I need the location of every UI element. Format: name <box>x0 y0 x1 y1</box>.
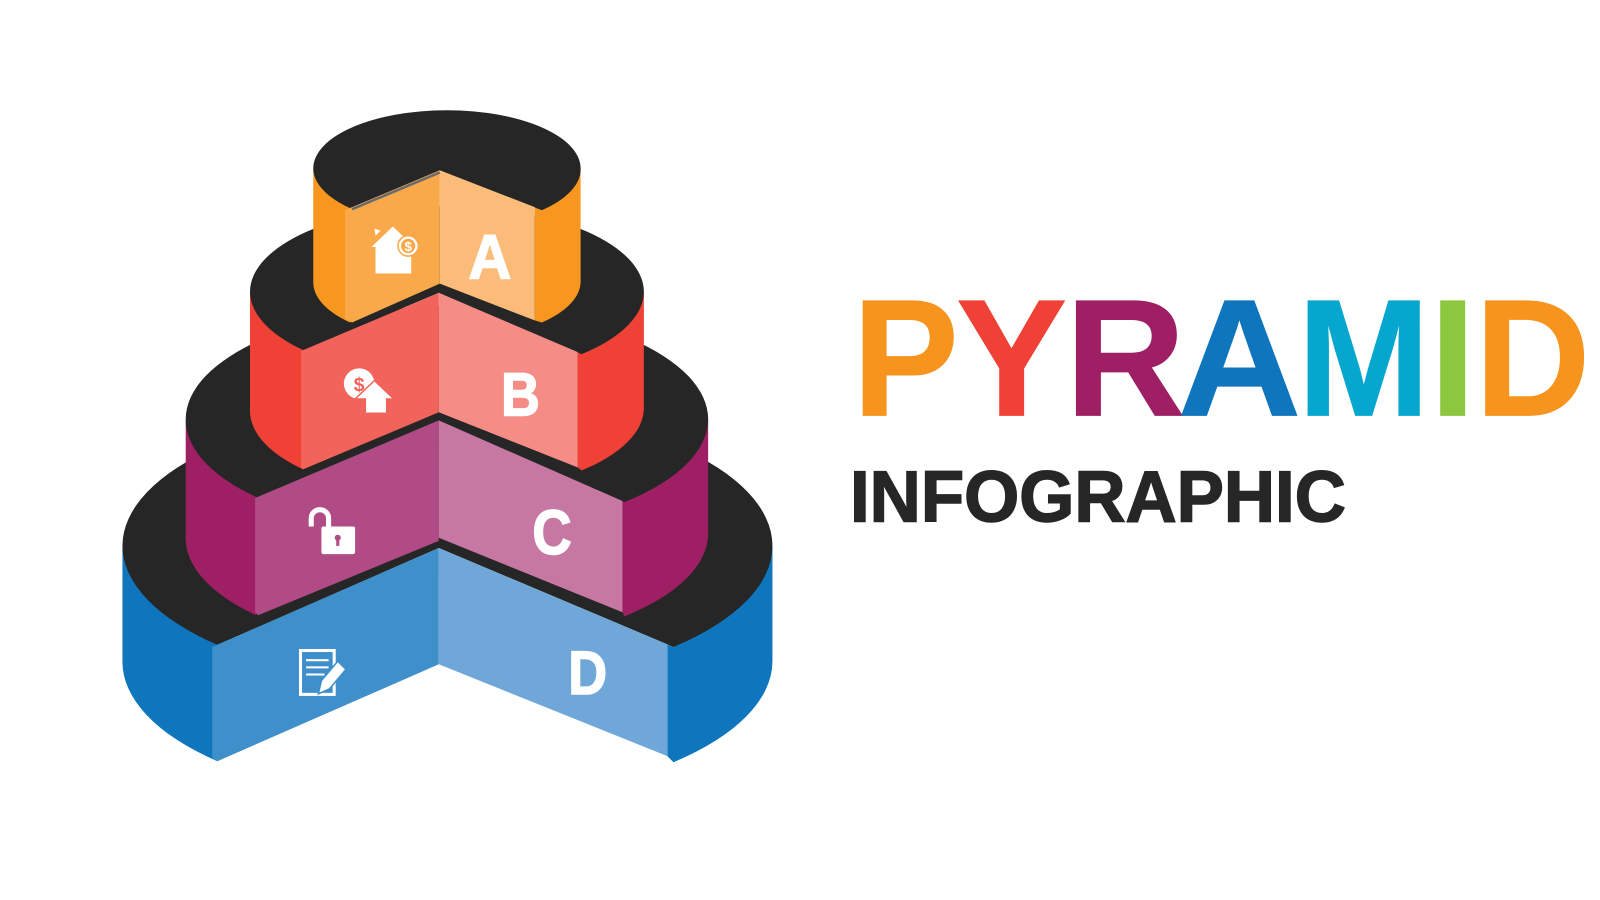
letter B: B <box>501 361 540 429</box>
icon: document with pencil <box>301 651 346 694</box>
tier A <box>313 110 581 322</box>
icon: open padlock <box>311 510 355 554</box>
pyramid <box>122 110 772 762</box>
letter D: D <box>568 640 607 708</box>
title: PYRAMID: M <box>1297 266 1430 451</box>
icon: dollar coin and house arrow: $ <box>354 374 365 396</box>
title: PYRAMID: D <box>1475 264 1590 451</box>
letter A: A <box>468 222 511 293</box>
title: PYRAMID: I <box>1430 265 1476 451</box>
tier C <box>186 306 708 616</box>
icon: dollar coin and house arrow <box>344 368 394 413</box>
title: PYRAMID: A <box>1178 265 1301 451</box>
tier B <box>250 206 644 470</box>
icon: house with coin <box>371 227 418 273</box>
icon: house with coin: $ <box>404 239 412 254</box>
letter C: C <box>532 497 572 568</box>
title: PYRAMID: P <box>853 266 959 451</box>
subtitle: INFOGRAPHIC: INFOGRAPHIC <box>850 457 1346 538</box>
title: PYRAMID <box>853 264 1590 451</box>
title: PYRAMID: Y <box>956 265 1067 451</box>
tier D <box>122 405 772 762</box>
title: PYRAMID: R <box>1065 265 1185 451</box>
